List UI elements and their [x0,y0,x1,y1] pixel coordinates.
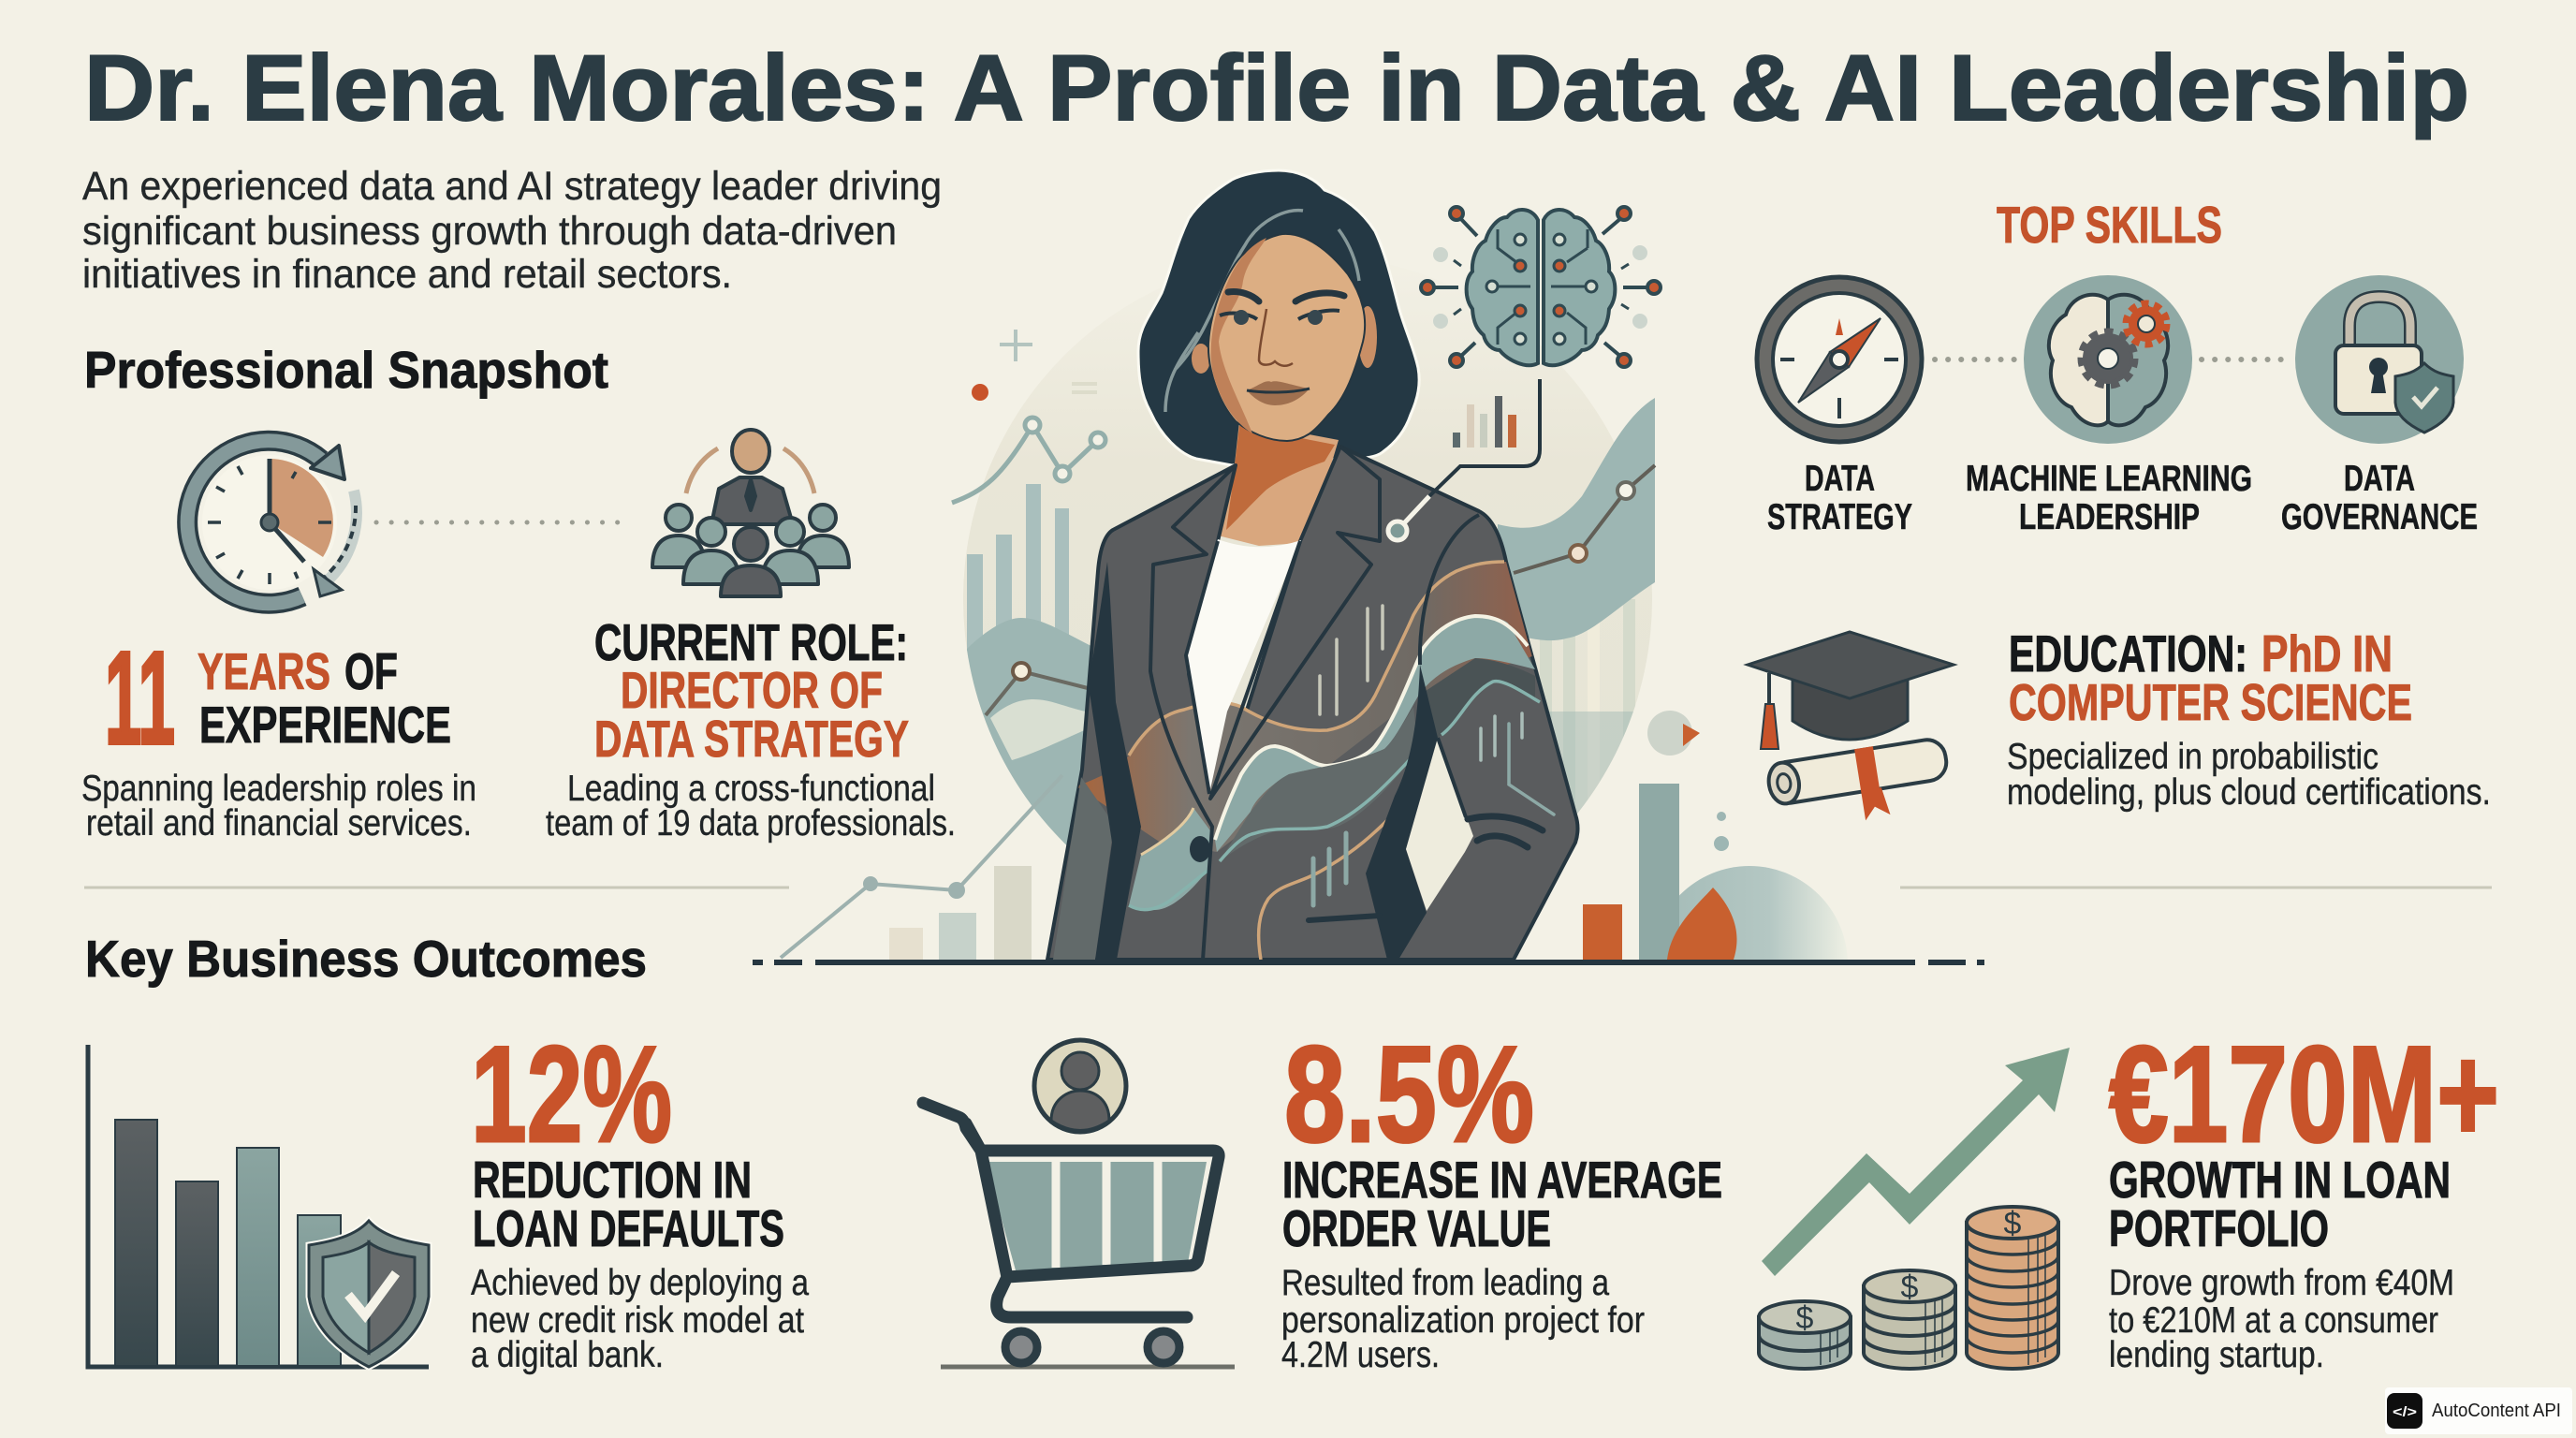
jacket button [1190,836,1210,862]
stat: current role: team of 19 data professionals. [546,803,956,844]
chart: lower-right bars and shapes [1583,711,1844,960]
outcome: loan defaults: a digital bank. [471,1335,664,1375]
education text: PhD IN [2261,624,2393,682]
outcome: average order value: personalization project for [1281,1300,1645,1341]
dotted connector [376,521,630,524]
education text: Specialized in probabilistic [2007,737,2378,777]
dotted connector [1935,357,2283,362]
icon: machine learning brain [2024,275,2192,444]
intro text: significant business growth through data-driven [82,209,897,254]
jacket outlines and lapels [1150,447,1479,960]
figure: hair highlights [1165,211,1359,412]
icon: coin stacks: $ [1901,1269,1919,1305]
icon: compass [1757,277,1922,442]
figure: hair [1138,170,1419,465]
icon: graduation cap and diploma [1748,632,1954,834]
chart: left node line [986,663,1088,715]
baseline [753,960,1984,965]
stat: 11 years of experience: EXPERIENCE [199,696,451,754]
badge: AutoContent API: AutoContent API [2432,1401,2561,1421]
outcome: loan defaults: 12% [471,1018,672,1170]
stat: current role: CURRENT ROLE: [594,613,908,671]
jacket detail marks [1309,606,1554,920]
education text: COMPUTER SCIENCE [2009,673,2412,731]
skill labels [1767,459,2478,537]
icon: coin stacks [1759,1206,2058,1369]
figure: shirt [1186,539,1301,794]
icon: brain with nodes [1421,207,1661,367]
outcome: loan portfolio: to €210M at a consumer [2109,1300,2438,1341]
figure: ears [1192,306,1377,374]
figure: face shadow [1211,238,1266,433]
skill labels: LEADERSHIP [2019,497,2200,537]
education text [2007,624,2491,813]
education text: EDUCATION: [2009,624,2247,682]
chart: right node line [1514,465,1655,573]
education text: modeling, plus cloud certifications. [2007,772,2491,813]
heading: professional snapshot: Professional Snapshot [84,341,608,399]
stat: 11 years of experience: YEARS [198,642,330,700]
chart: mini bars [1453,396,1516,448]
connector line [1388,379,1540,540]
figure: facial features [1220,292,1344,405]
outcome: average order value: INCREASE IN AVERAGE [1282,1151,1722,1209]
outcome: loan defaults: Achieved by deploying a [471,1263,809,1303]
stat: current role: DIRECTOR OF [621,661,883,719]
stat: 11 years of experience: OF [344,642,398,700]
stat: current role [546,613,956,844]
skill labels: STRATEGY [1767,497,1912,537]
stat: 11 years of experience [81,624,476,844]
outcome: loan portfolio [2109,1018,2499,1375]
outcome: average order value: 4.2M users. [1281,1335,1440,1375]
icon: leader with team [652,430,849,596]
outcome: average order value [1281,1018,1722,1375]
outcome: loan defaults: new credit risk model at [471,1300,804,1341]
icon: coin stacks: $ [1796,1300,1814,1336]
icon: growth arrow [1762,1048,2070,1276]
skill labels: MACHINE LEARNING [1966,459,2252,499]
chart: lower-left line and bars [781,775,1062,960]
icon: bar chart with shield [88,1045,429,1367]
outcome: average order value: ORDER VALUE [1282,1199,1551,1257]
intro text [82,164,942,297]
skill labels: GOVERNANCE [2281,497,2478,537]
icon: coin stacks: $ [2004,1206,2022,1241]
jacket pattern waves [1053,562,1540,960]
icon: clock with arrows [187,441,357,604]
outcome: loan defaults: REDUCTION IN [473,1151,752,1209]
right teal wave [1498,398,1655,640]
outcome: loan portfolio: Drove growth from €40M [2109,1263,2454,1303]
decorative marks [972,330,1097,401]
jacket dark folds [1089,562,1141,960]
central portrait illustration [753,170,1984,1063]
figure: neck [1218,421,1339,546]
outcome: loan defaults [471,1018,809,1375]
title: Dr. Elena Morales: A Profile in Data & AI Leadership [84,36,2469,139]
outcome: loan defaults: LOAN DEFAULTS [473,1199,784,1257]
intro text: An experienced data and AI strategy leader driving [82,164,942,209]
badge: AutoContent API [2385,1387,2572,1434]
chart: left line [952,418,1105,503]
outcome: loan portfolio: lending startup. [2109,1335,2324,1375]
outcome: loan portfolio: PORTFOLIO [2109,1199,2329,1257]
stat: 11 years of experience: 11 [105,624,175,771]
outcome: average order value: Resulted from leading a [1281,1263,1609,1303]
outcome: loan portfolio: GROWTH IN LOAN [2109,1151,2451,1209]
stat: current role: DATA STRATEGY [594,710,909,768]
heading: key business outcomes: Key Business Outcomes [85,930,647,988]
outcome: average order value: 8.5% [1284,1018,1534,1170]
skill labels: DATA [2344,459,2415,499]
badge: AutoContent API: </> [2393,1404,2417,1420]
icon: padlock with shield [2295,275,2464,444]
gap between arm and body [1406,738,1473,911]
figure: face [1208,234,1365,441]
skill labels: DATA [1805,459,1875,499]
heading: top skills: TOP SKILLS [1997,196,2222,254]
stat: current role: Leading a cross-functional [567,769,935,809]
stat: 11 years of experience: retail and financial services. [86,803,472,844]
stat: 11 years of experience: Spanning leadership roles in [81,769,476,809]
figure: jacket [1047,447,1578,960]
intro text: initiatives in finance and retail sectors. [82,252,732,297]
background data circle [963,360,1652,845]
icon: shopping cart with customer [923,1040,1235,1367]
